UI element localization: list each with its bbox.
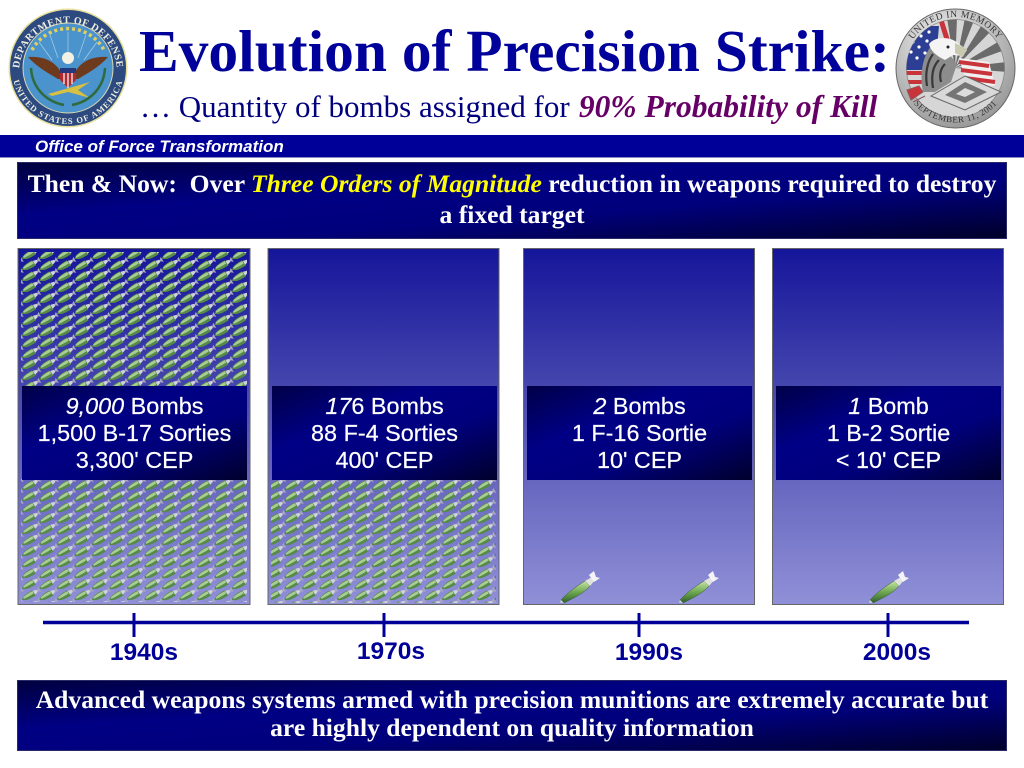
panel: 1940s xyxy=(18,248,250,604)
panel: 1990s xyxy=(524,248,754,604)
label: 2000s stats: 1 B-2 Sortie xyxy=(827,420,950,446)
label: 2000s stats xyxy=(776,386,1001,480)
icon: Department of Defense seal xyxy=(8,8,128,128)
top callout: a fixed target xyxy=(440,200,584,229)
top callout: Then & Now: Over Three Orders of Magnitude reduction in weapons required to destroy xyxy=(28,169,996,198)
bomb panels xyxy=(18,248,1004,605)
icon: United in Memory seal: UNITED IN MEMORY xyxy=(908,10,1003,38)
label: 1970s stats xyxy=(272,386,497,480)
label: 1990s stats: 10' CEP xyxy=(597,447,682,473)
icon: United in Memory seal xyxy=(896,8,1016,128)
label: 1990s stats xyxy=(527,386,752,480)
year label: 1990s xyxy=(615,639,683,666)
label: 1970s stats: 400' CEP xyxy=(335,447,434,473)
label: 1940s stats: 1,500 B-17 Sorties xyxy=(38,420,231,446)
panel: 1970s xyxy=(268,248,499,604)
icon: Department of Defense seal: UNITED STATES OF AMERICA xyxy=(14,79,122,124)
label: 1940s stats: 9,000 Bombs xyxy=(66,393,203,419)
header band xyxy=(0,135,1024,158)
icon: bomb xyxy=(869,571,909,603)
label: 1970s stats: 176 Bombs xyxy=(325,393,444,419)
icon: Department of Defense seal: DEPARTMENT OF DEFENSE xyxy=(12,16,124,68)
title: Evolution of Precision Strike: xyxy=(139,18,890,84)
icon: bomb xyxy=(679,571,719,603)
label: 1990s stats: 2 Bombs xyxy=(593,393,686,419)
bottom callout: Advanced weapons systems armed with precision munitions are extremely accurate but xyxy=(36,685,988,714)
timeline xyxy=(43,613,969,637)
panel: 2000s xyxy=(772,248,1004,604)
subtitle: … Quantity of bombs assigned for 90% Probability of Kill xyxy=(140,89,877,124)
year label: 1940s xyxy=(110,639,178,666)
year label: 1970s xyxy=(357,638,425,665)
top callout xyxy=(17,162,1007,239)
label: 2000s stats: < 10' CEP xyxy=(836,447,941,473)
bottom callout xyxy=(17,680,1007,751)
label: 1940s stats xyxy=(22,386,247,480)
band label: Office of Force Transformation xyxy=(35,137,284,156)
label: 1990s stats: 1 F-16 Sortie xyxy=(572,420,707,446)
label: 1970s stats: 88 F-4 Sorties xyxy=(311,420,458,446)
year label: 2000s xyxy=(863,639,931,666)
icon: United in Memory seal: SEPTEMBER 11, 2001 xyxy=(914,100,996,122)
icon: bomb xyxy=(560,571,600,603)
bottom callout: are highly dependent on quality information xyxy=(270,713,754,742)
label: 2000s stats: 1 Bomb xyxy=(848,393,929,419)
label: 1940s stats: 3,300' CEP xyxy=(76,447,193,473)
